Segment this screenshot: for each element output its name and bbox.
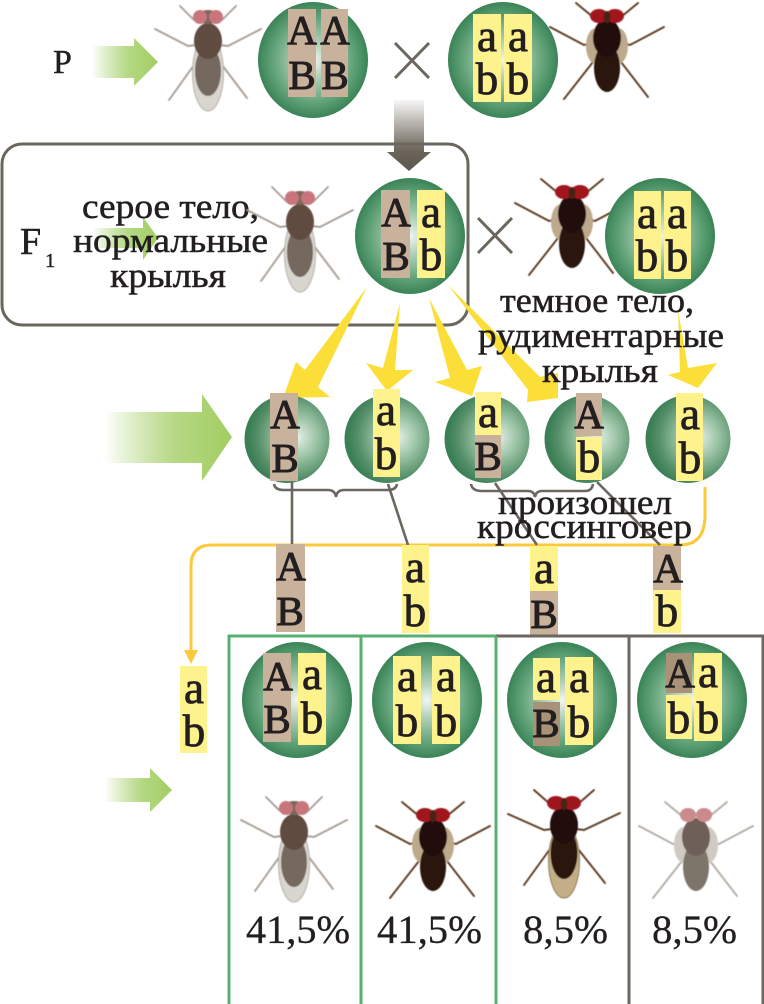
gamete: AB: B xyxy=(271,435,299,481)
offspring genotype: AB/ab: A xyxy=(263,653,293,699)
circle: AA BB genotype: B xyxy=(288,52,316,98)
text: grey body, normal wings: нормальные xyxy=(73,221,268,260)
circle: AA BB genotype xyxy=(258,2,368,118)
circle: aa bb genotype: a xyxy=(477,11,497,61)
circle: F1 aa bb genotype: b xyxy=(666,231,688,281)
offspring genotype: AB/ab xyxy=(242,642,352,758)
label: P: Р xyxy=(53,44,72,81)
label: F1: F xyxy=(20,221,41,263)
offspring genotype: aB/ab xyxy=(507,642,617,758)
arrows: yellow to gametes xyxy=(283,285,717,402)
chromosome: ab: a xyxy=(405,542,425,592)
circle: F1 Ab/ab genotype: b xyxy=(420,230,442,280)
text: dark body, vestigial wings: крылья xyxy=(542,351,658,390)
braces and connector lines xyxy=(274,482,660,545)
gamete: Ab: b xyxy=(578,432,600,482)
gamete: ab xyxy=(646,389,730,483)
percent: 8,5: 8,5% xyxy=(652,907,737,952)
chromosome: Ab: A xyxy=(653,545,683,591)
offspring genotype: aB/ab: a xyxy=(536,652,556,702)
label: F1: 1 xyxy=(45,250,55,272)
circle: AA BB genotype: A xyxy=(287,7,317,53)
offspring genotype: aB/ab: a xyxy=(569,652,589,702)
gamete: ab: b xyxy=(679,433,701,483)
gamete: ab: a xyxy=(680,389,700,439)
offspring genotype: Ab/ab xyxy=(637,642,747,758)
gamete: Ab xyxy=(544,391,630,483)
gamete: ab: a xyxy=(376,385,396,435)
orange connector arrow xyxy=(184,487,705,664)
offspring genotype: aB/ab: b xyxy=(568,697,590,747)
arrow: down to F1 xyxy=(387,100,431,171)
circle: aa bb genotype: b xyxy=(507,54,529,104)
fly: offspring dark vestigial xyxy=(376,802,490,898)
chromosome: AB xyxy=(276,543,306,634)
gamete: aB: a xyxy=(478,387,498,437)
cross sign xyxy=(478,218,512,253)
chromosome: ab tester gamete xyxy=(180,663,207,756)
panel: F1 box xyxy=(2,144,468,325)
arrow: parent generation xyxy=(92,38,158,86)
fly: offspring grey normal xyxy=(241,797,347,902)
gamete: aB: B xyxy=(474,433,502,479)
percent: 41,5: 41,5% xyxy=(246,907,350,952)
chromosome: ab xyxy=(402,542,429,636)
text: dark body, vestigial wings: рудиментарные xyxy=(478,316,724,355)
circle: aa bb genotype: a xyxy=(508,11,528,61)
offspring genotype: Ab/ab: b xyxy=(697,693,719,743)
offspring genotype: Ab/ab: A xyxy=(665,650,695,696)
arrow: gametes xyxy=(105,394,232,481)
circle: aa bb genotype xyxy=(448,2,558,118)
gamete: ab xyxy=(344,385,430,483)
percent: 41,5: 41,5% xyxy=(377,907,482,952)
offspring genotype: Ab/ab: a xyxy=(698,647,718,697)
circle: F1 Ab/ab genotype: A xyxy=(381,189,411,235)
chromosome: aB: B xyxy=(530,591,558,637)
text: dark body, vestigial wings: темное тело, xyxy=(500,281,694,320)
arrow: offspring xyxy=(105,768,172,812)
text: grey body, normal wings: серое тело, xyxy=(82,187,259,226)
offspring genotype: AB/ab: B xyxy=(263,696,291,742)
offspring genotype: AB/ab: b xyxy=(301,693,323,743)
circle: AA BB genotype: A xyxy=(320,7,350,53)
offspring genotype: ab/ab: a xyxy=(436,651,456,701)
text: crossing over occurred xyxy=(477,483,692,546)
circle: aa bb genotype: b xyxy=(476,54,498,104)
fly: offspring dark normal xyxy=(508,790,620,898)
offspring genotype: aB/ab: B xyxy=(532,700,560,746)
gamete: AB xyxy=(244,391,330,483)
offspring genotype: ab/ab: b xyxy=(396,696,418,746)
circle: AA BB genotype: B xyxy=(321,52,349,98)
chromosome: AB: A xyxy=(276,543,306,589)
offspring genotype: ab/ab xyxy=(372,642,482,758)
text: dark body, vestigial wings xyxy=(478,281,724,390)
offspring genotype: ab/ab: b xyxy=(435,696,457,746)
fly: offspring grey vestigial xyxy=(639,802,753,898)
offspring genotype: AB/ab: a xyxy=(302,649,322,699)
offspring genotype: Ab/ab: b xyxy=(668,693,690,743)
gamete: aB xyxy=(444,387,530,483)
panel: offspring table xyxy=(229,636,763,1004)
gamete: ab: b xyxy=(375,429,397,479)
offspring genotype: ab/ab: a xyxy=(397,651,417,701)
circle: F1 Ab/ab genotype xyxy=(355,178,465,294)
chromosome: aB: a xyxy=(534,543,554,593)
text: crossing over occurred: кроссинговер xyxy=(477,507,692,546)
chromosome: ab tester gamete: a xyxy=(184,663,204,713)
arrow: F1 generation xyxy=(92,217,158,260)
gamete: AB: A xyxy=(270,391,300,437)
chromosome: Ab xyxy=(653,545,683,636)
fly: F1 dark xyxy=(515,179,629,275)
circle: F1 aa bb genotype: b xyxy=(636,231,658,281)
circle: F1 aa bb genotype xyxy=(605,178,715,294)
chromosome: ab tester gamete: b xyxy=(183,706,205,756)
fly: dark body, vestigial wings xyxy=(550,3,664,99)
chromosome: AB: B xyxy=(276,588,304,634)
fly: grey body, normal wings xyxy=(155,6,261,111)
chromosome: Ab: b xyxy=(656,586,678,636)
chromosome: aB xyxy=(530,543,558,637)
circle: F1 Ab/ab genotype: B xyxy=(382,233,410,279)
cross sign xyxy=(395,43,429,78)
circle: F1 Ab/ab genotype: a xyxy=(421,187,441,237)
chromosome: ab: b xyxy=(404,586,426,636)
circle: F1 aa bb genotype: a xyxy=(667,188,687,238)
text: crossing over occurred: произошел xyxy=(498,483,672,522)
fly: F1 grey xyxy=(247,187,353,292)
text: grey body, normal wings: крылья xyxy=(110,256,226,295)
percent: 8,5: 8,5% xyxy=(523,907,608,952)
text: grey body, normal wings xyxy=(73,187,268,295)
circle: F1 aa bb genotype: a xyxy=(637,188,657,238)
gamete: Ab: A xyxy=(574,391,604,437)
